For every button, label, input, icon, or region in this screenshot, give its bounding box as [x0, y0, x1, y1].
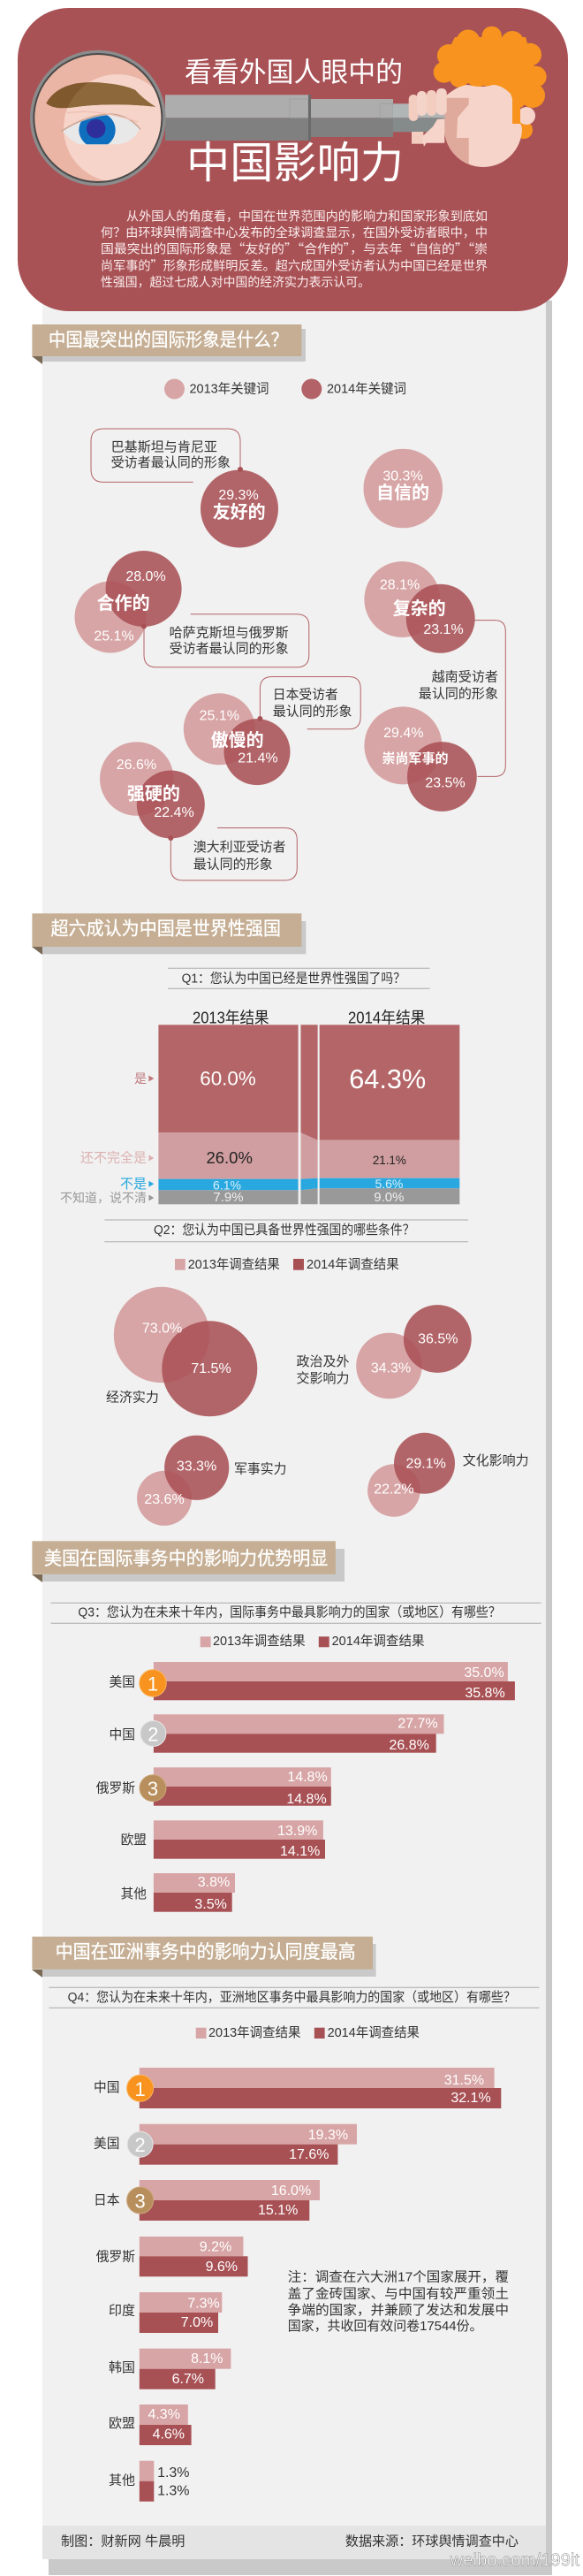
- heading: section 4: 中国在亚洲事务中的影响力认同度最高: [56, 1942, 356, 1962]
- bars: Russia: 9.6%: [206, 2260, 238, 2275]
- bars: USA: 35.8%: [465, 1686, 505, 1701]
- callout: Japan: [260, 677, 360, 729]
- bubble: complex: 28.1%: [380, 578, 420, 592]
- note text: 注：调查在六大洲17个国家展开，覆: [288, 2270, 509, 2284]
- bars: EU: [121, 1820, 325, 1859]
- bars: other: [121, 1873, 235, 1912]
- callout: Australia: 最认同的形象: [193, 857, 273, 872]
- bars: USA: 19.3%: [308, 2128, 348, 2143]
- bars: India: [109, 2292, 222, 2333]
- bars: Russia: 9.2%: [200, 2240, 231, 2254]
- bubble: political and diplomatic influence: 政治及外: [297, 1354, 350, 1369]
- callout: Australia: 澳大利亚受访者: [193, 840, 286, 855]
- heading: section 2: 超六成认为中国是世界性强国: [51, 919, 281, 939]
- chart row labels: 是: [134, 1071, 147, 1086]
- bubble: arrogant: 21.4%: [238, 751, 278, 766]
- bars: India: 7.3%: [187, 2297, 220, 2311]
- legend: Q2: 2014年调查结果: [307, 1257, 399, 1272]
- bars: Russia: 14.8%: [286, 1792, 327, 1807]
- bubble: militaristic: 29.4%: [383, 726, 423, 741]
- bubble: tough: 26.6%: [117, 758, 156, 773]
- bars: USA: [110, 1662, 515, 1701]
- bars: China: [94, 2068, 501, 2108]
- bars: USA: 17.6%: [289, 2147, 329, 2162]
- bubble: political and diplomatic influence: 36.5%: [418, 1331, 458, 1347]
- bars: Russia: [96, 2237, 247, 2276]
- footer: 数据来源：环球舆情调查中心: [345, 2534, 519, 2549]
- bubble: economic power: 经济实力: [106, 1390, 159, 1406]
- bars: China: [110, 1714, 443, 1753]
- callout: Kazakhstan and Russia: [144, 614, 309, 667]
- legend: Q4: 2014年调查结果: [328, 2025, 420, 2040]
- medal: third: 3: [148, 1778, 158, 1800]
- chart: Q1 stacked columns: 5.6%: [375, 1177, 403, 1191]
- bars: China: 32.1%: [450, 2091, 491, 2106]
- bubble: friendly: [201, 467, 278, 548]
- bubble: complex: 复杂的: [393, 598, 446, 619]
- bars: South Korea: 8.1%: [191, 2351, 223, 2366]
- title line 1: 看看外国人眼中的: [185, 57, 403, 88]
- bars: other: 3.5%: [194, 1897, 227, 1912]
- bars: other: 1.3%: [157, 2484, 190, 2498]
- medal: second: 2: [134, 2134, 146, 2156]
- bars: other: 其他: [109, 2473, 135, 2488]
- legend: Q3: 2014年调查结果: [332, 1634, 424, 1649]
- question: Q4: Q4：您认为在未来十年内，亚洲地区事务中最具影响力的国家（或地区）有哪些？: [68, 1990, 516, 2005]
- callout: Pakistan and Kenya: 巴基斯坦与肯尼亚: [111, 440, 217, 454]
- bubble: tough: [100, 742, 205, 841]
- bars: China: 26.8%: [390, 1738, 429, 1753]
- legend: keywords: 2013年关键词: [189, 382, 269, 396]
- bars: South Korea: 6.7%: [172, 2372, 204, 2387]
- bar chart: Q3: [96, 1662, 515, 1912]
- chart row labels: 还不完全是: [80, 1149, 147, 1165]
- callout: Pakistan and Kenya: 受访者最认同的形象: [111, 455, 231, 470]
- callout: Kazakhstan and Russia: 哈萨克斯坦与俄罗斯: [170, 626, 289, 640]
- bars: USA: 美国: [94, 2136, 119, 2152]
- bubble: tough: 强硬的: [127, 783, 180, 804]
- legend: keywords: 2014年关键词: [327, 382, 406, 396]
- intro text: 尚军事的”形象形成鲜明反差。超六成国外受访者认为中国已经是世界: [101, 256, 488, 274]
- footer: 制图：财新网 牛晨明: [61, 2534, 185, 2549]
- bubble: military power: 33.3%: [177, 1459, 216, 1475]
- callout: Pakistan and Kenya: [91, 429, 240, 482]
- bubble: political and diplomatic influence: 交影响力: [297, 1370, 350, 1386]
- note text: 国家，共收回有效问卷17544份。: [288, 2319, 482, 2334]
- callout: Japan: 最认同的形象: [273, 704, 352, 720]
- chart: Q1 stacked columns: 21.1%: [373, 1154, 406, 1167]
- bubble: military power: 23.6%: [144, 1492, 185, 1507]
- heading: section 3: [32, 1541, 344, 1582]
- bubble: friendly: 友好的: [213, 502, 266, 522]
- bars: other: 3.8%: [198, 1875, 230, 1890]
- legend: Q2: 2013年调查结果: [188, 1257, 280, 1272]
- chart: Q1 stacked columns: 60.0%: [200, 1068, 256, 1089]
- bubble: confident: 30.3%: [382, 469, 423, 484]
- icon: telescope: [165, 95, 452, 141]
- callout: Kazakhstan and Russia: 受访者最认同的形象: [170, 642, 289, 656]
- intro text: 国最突出的国际形象是“友好的”“合作的”，与去年“自信的”“崇: [101, 240, 488, 258]
- icon: observer head with orange hair: [434, 27, 547, 172]
- legend: Q4: [196, 2025, 420, 2040]
- bubble: political and diplomatic influence: [297, 1305, 472, 1399]
- bars: EU: 4.6%: [153, 2427, 185, 2442]
- chart: Q1 stacked columns: 64.3%: [349, 1063, 426, 1094]
- chart row labels: 不知道，说不清: [60, 1191, 147, 1205]
- legend: Q2: [175, 1257, 399, 1272]
- medal: third: [127, 2187, 154, 2214]
- panel: title card: [18, 8, 568, 311]
- bubble: arrogant: [184, 693, 290, 785]
- bubble: confident: 自信的: [376, 483, 429, 503]
- callout: Japan: 日本受访者: [273, 687, 338, 702]
- bars: other: 其他: [121, 1886, 147, 1902]
- medal: first: [140, 1670, 166, 1696]
- bars: South Korea: 韩国: [109, 2360, 135, 2375]
- chart row labels: [60, 1071, 154, 1205]
- medal: second: [127, 2131, 153, 2157]
- icon: magnifier lens with eye: [30, 50, 171, 186]
- heading: section 4: [32, 1937, 376, 1978]
- footer: [42, 2526, 546, 2559]
- bars: India: 印度: [109, 2304, 135, 2318]
- bubble: complex: [364, 561, 475, 653]
- legend: Q4: 2013年调查结果: [208, 2025, 300, 2040]
- legend: keywords: [164, 378, 406, 400]
- bars: Russia: 俄罗斯: [96, 1780, 135, 1796]
- bars: other: [109, 2461, 190, 2502]
- bubble: cultural influence: [367, 1433, 529, 1517]
- bars: South Korea: [109, 2349, 231, 2389]
- bubble: economic power: 73.0%: [142, 1321, 182, 1337]
- note text: [288, 2270, 509, 2334]
- intro text: 性强国，超过七成人对中国的经济实力表示认可。: [101, 273, 370, 291]
- chart: Q1 stacked columns: 6.1%: [213, 1177, 241, 1192]
- bubble: militaristic: 23.5%: [425, 776, 466, 790]
- question: Q2: Q2：您认为中国已具备世界性强国的哪些条件？: [154, 1223, 415, 1238]
- heading: section 1: 中国最突出的国际形象是什么？: [49, 331, 288, 350]
- medal: first: [127, 2075, 154, 2101]
- title line 2: 中国影响力: [186, 140, 404, 187]
- bars: China: 中国: [94, 2080, 119, 2095]
- chart: Q1 stacked columns: 2014年结果: [348, 1010, 425, 1027]
- medal: second: 2: [148, 1724, 159, 1745]
- chart: Q1 stacked columns: 26.0%: [206, 1148, 253, 1167]
- bubble: tough: 22.4%: [154, 805, 194, 820]
- watermark: weibo.com/199it: [450, 2551, 579, 2571]
- chart: Q1 stacked columns: 9.0%: [374, 1190, 405, 1205]
- intro text: 何？由环球舆情调查中心发布的全球调查显示，在国外受访者眼中，中: [101, 224, 488, 241]
- note text: 盖了金砖国家、与中国有较严重领土: [288, 2286, 509, 2302]
- intro text: 从外国人的角度看，中国在世界范围内的影响力和国家形象到底如: [126, 207, 488, 225]
- bars: USA: 美国: [110, 1674, 135, 1690]
- bars: other: 1.3%: [157, 2465, 190, 2481]
- bars: China: 中国: [110, 1727, 135, 1742]
- question: Q1: Q1：您认为中国已经是世界性强国了吗？: [182, 971, 405, 987]
- callout: Vietnam: [419, 621, 505, 776]
- callout: Vietnam: 越南受访者: [432, 670, 498, 684]
- bars: EU: 13.9%: [277, 1824, 317, 1839]
- bubble: political and diplomatic influence: 34.3%: [371, 1361, 411, 1376]
- bars: China: 31.5%: [444, 2073, 484, 2088]
- medal: first: 1: [134, 2078, 146, 2100]
- bars: EU: 欧盟: [109, 2416, 135, 2431]
- heading: section 3: 美国在国际事务中的影响力优势明显: [44, 1549, 328, 1569]
- bars: EU: [109, 2405, 192, 2445]
- bubble: friendly: 29.3%: [218, 488, 259, 503]
- callout: Australia: [170, 827, 297, 880]
- bars: Japan: 15.1%: [258, 2203, 298, 2218]
- bubble: arrogant: 25.1%: [200, 709, 239, 723]
- bubble: economic power: 71.5%: [191, 1361, 231, 1376]
- medal: third: 3: [134, 2191, 146, 2212]
- bubble: arrogant: 傲慢的: [211, 730, 264, 751]
- bars: Russia: 14.8%: [287, 1770, 328, 1785]
- bars: Russia: 俄罗斯: [96, 2249, 135, 2265]
- heading: section 1: [32, 324, 306, 364]
- bars: Japan: [94, 2180, 320, 2221]
- medal: third: [140, 1775, 166, 1802]
- bubble: militaristic: [364, 706, 477, 812]
- bubble: military power: [137, 1436, 286, 1526]
- panel: background: [42, 301, 552, 2575]
- bars: India: 7.0%: [181, 2315, 213, 2330]
- bubble: cultural influence: 文化影响力: [463, 1453, 529, 1468]
- chart: Q1 stacked columns: 2013年结果: [193, 1010, 269, 1027]
- bubble: cooperative: 28.0%: [125, 569, 166, 584]
- bubble: militaristic: 崇尚军事的: [382, 751, 449, 766]
- legend: Q3: 2013年调查结果: [213, 1634, 306, 1649]
- bubble: complex: 23.1%: [423, 622, 464, 637]
- question: Q3: Q3：您认为在未来十年内，国际事务中最具影响力的国家（或地区）有哪些？: [78, 1605, 501, 1620]
- bubble: cooperative: [74, 551, 182, 652]
- bars: Russia: [96, 1767, 331, 1807]
- note text: 争端的国家，并兼顾了发达和发展中: [288, 2302, 509, 2318]
- chart: Q1 stacked columns: 7.9%: [213, 1190, 244, 1205]
- bubble: cultural influence: 22.2%: [374, 1482, 414, 1498]
- chart: Q1 stacked columns: [60, 1010, 459, 1205]
- bubble: military power: 军事实力: [234, 1462, 286, 1476]
- chart row labels: 不是: [120, 1177, 147, 1192]
- bars: Japan: 16.0%: [271, 2184, 311, 2199]
- medal: first: 1: [148, 1673, 158, 1696]
- heading: section 2: [32, 913, 306, 955]
- bar chart: Q4: [94, 2068, 501, 2502]
- icon: hand holding telescope: [409, 88, 447, 147]
- bubble: cultural influence: 29.1%: [406, 1457, 446, 1471]
- callout: Vietnam: 最认同的形象: [419, 686, 498, 702]
- bars: USA: [94, 2124, 357, 2165]
- bars: USA: 35.0%: [464, 1665, 504, 1680]
- bubble: cooperative: 25.1%: [94, 629, 134, 644]
- bars: Japan: 日本: [94, 2192, 119, 2208]
- bars: EU: 4.3%: [148, 2407, 180, 2422]
- legend: Q3: [201, 1634, 424, 1649]
- bubble: confident: [364, 449, 443, 528]
- medal: second: [140, 1720, 166, 1747]
- intro text: [101, 207, 488, 291]
- bubble: cooperative: 合作的: [97, 593, 150, 614]
- bars: China: 27.7%: [398, 1717, 438, 1731]
- bubble: economic power: [106, 1287, 257, 1416]
- bars: EU: 14.1%: [280, 1844, 320, 1859]
- bars: EU: 欧盟: [121, 1833, 147, 1848]
